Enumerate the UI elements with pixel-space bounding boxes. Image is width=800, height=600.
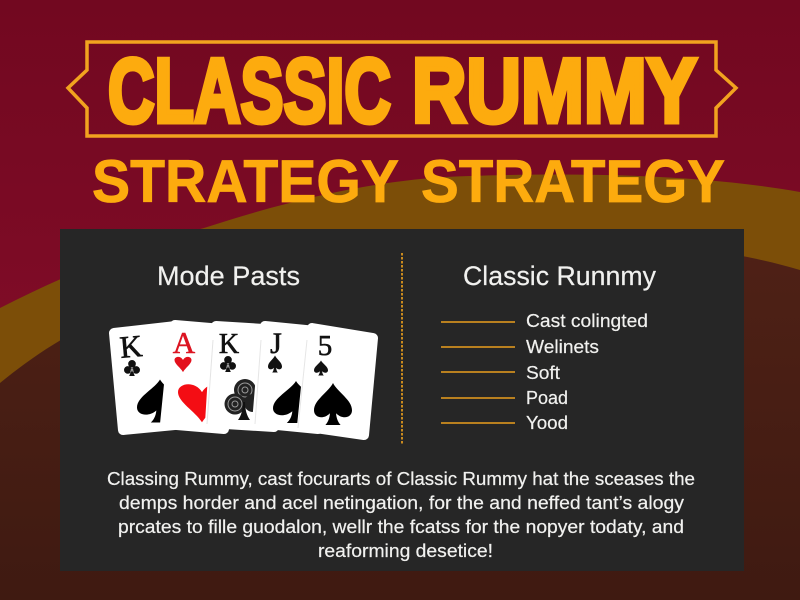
panel: main dark card (60, 229, 744, 571)
icon: ornate club (224, 379, 262, 420)
description paragraph: demps horder and acel netingation, for the and neffed tant’s alogy (119, 493, 684, 513)
list row: poad: Poad (526, 388, 568, 408)
list row: yood: Yood (526, 413, 568, 433)
list row: soft: Soft (526, 363, 560, 383)
title: classic rummy (108, 41, 697, 142)
card: jack of spades: J (270, 327, 282, 360)
title: classic rummy: RUMMY (412, 41, 697, 142)
list row: cast colingted: Cast colingted (526, 311, 648, 331)
card: five of spades (298, 328, 373, 435)
heading: classic runnmy: Classic Runnmy (463, 261, 656, 291)
description paragraph: prcates to fille guodalon, wellr the fcatss for the nopyer todaty, and (118, 517, 684, 537)
card: king of clubs ornate: K (219, 329, 239, 360)
title: classic rummy: CLASSIC (108, 41, 391, 142)
list row: yood (441, 413, 568, 433)
list row: poad (441, 388, 568, 408)
card: king of clubs (114, 326, 185, 430)
heading: mode pasts: Mode Pasts (157, 261, 300, 291)
card: king of clubs ornate (207, 326, 280, 427)
background: dark brown lower area (0, 239, 800, 600)
subtitle: strategy strategy: STRATEGY (92, 148, 399, 215)
dotted divider (401, 253, 403, 445)
subtitle: strategy strategy (92, 148, 725, 215)
card: ace of hearts: A (173, 325, 196, 360)
subtitle: strategy strategy: STRATEGY (421, 148, 725, 215)
title frame (68, 42, 736, 136)
card: king of clubs: K (118, 328, 144, 365)
description paragraph: Classing Rummy, cast focurarts of Classic Rummy hat the sceases the (107, 469, 695, 489)
list row: soft (441, 363, 560, 383)
list row: welinets: Welinets (526, 337, 599, 357)
list: strategy items (441, 311, 648, 433)
card: jack of spades (255, 326, 326, 429)
card: ace of hearts (165, 325, 234, 429)
description paragraph: reaforming desetice! (318, 541, 493, 561)
card: five of spades: 5 (318, 330, 332, 362)
playing cards fan (114, 325, 373, 435)
background: gold swoosh band (0, 175, 800, 600)
description paragraph (107, 469, 695, 561)
